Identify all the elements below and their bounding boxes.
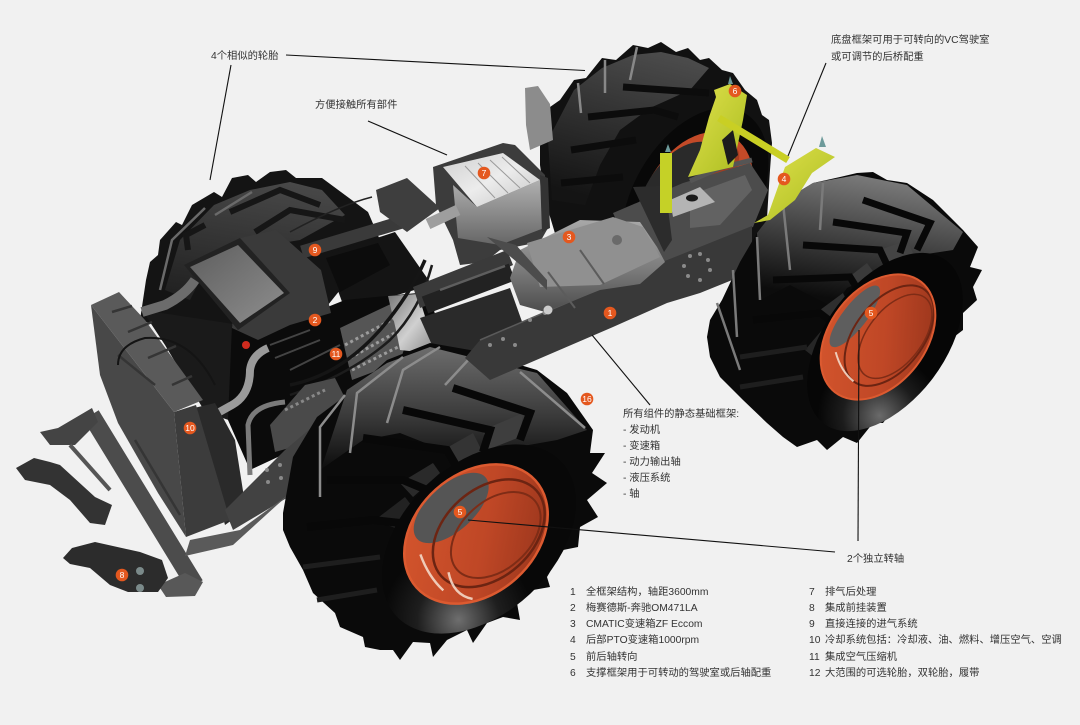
engine backfill: [142, 232, 432, 430]
marker 5 front: 5: [458, 507, 463, 517]
exhaust stack: [525, 86, 553, 150]
marker 2: [309, 314, 321, 326]
front wheel rim: [376, 436, 576, 632]
gearbox: [487, 217, 665, 314]
marker 8: [116, 569, 128, 581]
legend left column: 支撑框架用于可转动的驾驶室或后轴配重: [586, 666, 771, 679]
label: easy access: 方便接触所有部件: [315, 98, 397, 111]
marker 6: [729, 85, 741, 97]
exhaust after-treatment box: [428, 143, 550, 265]
legend right column: 11: [809, 652, 820, 663]
label: static base frame list: - 轴: [623, 487, 640, 500]
label: static base frame list: [623, 407, 739, 500]
marker 3: 3: [567, 232, 572, 242]
tire: rear left behind engine: [140, 170, 380, 340]
tractor chassis illustration: [16, 42, 994, 671]
legend left column: 4: [570, 635, 576, 646]
main frame rail: [465, 226, 752, 380]
legend right column: 集成空气压缩机: [825, 650, 898, 663]
front tire lugs: [303, 347, 585, 600]
legend right column: 12: [809, 668, 821, 679]
legend left column: 3: [570, 619, 576, 630]
label: chassis frame configuration: [831, 33, 989, 63]
marker 6: 6: [733, 86, 738, 96]
marker 5 front: [454, 506, 466, 518]
marker 11: 11: [332, 349, 341, 359]
label: static base frame list: - 变速箱: [623, 439, 660, 452]
number markers: [116, 85, 877, 581]
rear tire sidewall: [776, 224, 994, 460]
label: static base frame list: - 动力输出轴: [623, 455, 681, 468]
legend left column: 6: [570, 668, 576, 679]
leader line: front steering axle: [468, 520, 835, 552]
engine block: [228, 260, 445, 470]
label: static base frame list: - 液压系统: [623, 471, 670, 484]
marker 16: 16: [582, 394, 592, 404]
tire: front right: [283, 343, 613, 671]
legend left column: 梅赛德斯-奔驰OM471LA: [586, 601, 698, 614]
legend right column: 集成前挂装置: [825, 601, 887, 614]
radiator cooling pack: [91, 292, 246, 537]
marker 10: [184, 422, 196, 434]
legend right column: 7: [809, 587, 815, 598]
legend left column: CMATIC变速箱ZF Eccom: [586, 617, 703, 630]
coolant pipes: [142, 280, 285, 475]
legend left column: 2: [570, 603, 576, 614]
marker 11: [330, 348, 342, 360]
rear tire lugs: [717, 183, 930, 387]
rear wheel rim: [797, 252, 959, 422]
marker 9: [309, 244, 321, 256]
marker 4: [778, 173, 790, 185]
marker 1: 1: [608, 308, 613, 318]
legend left column: 前后轴转向: [586, 650, 637, 663]
legend right column: [809, 585, 1062, 679]
chassis rear cradle: [613, 160, 768, 263]
yellow cab support frame: [665, 76, 835, 223]
lower front frame arm: [185, 360, 470, 556]
front linkage: [16, 408, 203, 597]
legend right column: 8: [809, 603, 815, 614]
tire: rear near right: [707, 172, 994, 460]
legend right column: 排气后处理: [825, 585, 876, 598]
marker 7: 7: [482, 168, 487, 178]
legend right column: 大范围的可选轮胎，双轮胎，履带: [825, 666, 979, 679]
label: static base frame list: 所有组件的静态基础框架:: [623, 407, 739, 420]
marker 2: 2: [313, 315, 318, 325]
marker 9: 9: [313, 245, 318, 255]
under-shaft brackets: [420, 288, 525, 352]
marker 16: [581, 393, 593, 405]
drive shaft: [413, 250, 513, 308]
marker 5 rear: 5: [869, 308, 874, 318]
label: static base frame list: - 发动机: [623, 423, 661, 436]
marker 7: [478, 167, 490, 179]
legend left column: 全框架结构，轴距3600mm: [586, 585, 708, 598]
label: four similar tires: 4个相似的轮胎: [211, 49, 279, 62]
tire: far rear: [540, 42, 799, 318]
legend right column: 9: [809, 619, 815, 630]
leader line: access: [368, 121, 447, 155]
marker 10: 10: [185, 423, 195, 433]
front tire sidewall: [345, 407, 613, 671]
marker 3: [563, 231, 575, 243]
label: two independent steering axles: 2个独立转轴: [847, 552, 904, 565]
air intake system: [184, 178, 440, 340]
label: chassis frame configuration: 或可调节的后桥配重: [831, 50, 924, 63]
legend right column: 冷却系统包括：冷却液、油、燃料、增压空气、空调: [825, 633, 1062, 646]
leader line: base frame: [592, 335, 650, 405]
marker 8: 8: [120, 570, 125, 580]
legend right column: 直接连接的进气系统: [825, 617, 918, 630]
marker 1: [604, 307, 616, 319]
marker 5 rear: [865, 307, 877, 319]
legend right column: 10: [809, 635, 821, 646]
label: chassis frame configuration: 底盘框架可用于可转向的VC驾驶室: [831, 33, 989, 46]
legend left column: 后部PTO变速箱1000rpm: [586, 633, 699, 646]
marker 4: 4: [782, 174, 787, 184]
legend left column: [570, 585, 771, 679]
leader line: tires to left: [210, 65, 231, 180]
leader line: rear steering axle: [858, 330, 859, 541]
legend left column: 1: [570, 587, 576, 598]
leader line: tires to top-right: [286, 55, 585, 70]
leader line: cab frame: [788, 63, 826, 156]
legend left column: 5: [570, 652, 576, 663]
